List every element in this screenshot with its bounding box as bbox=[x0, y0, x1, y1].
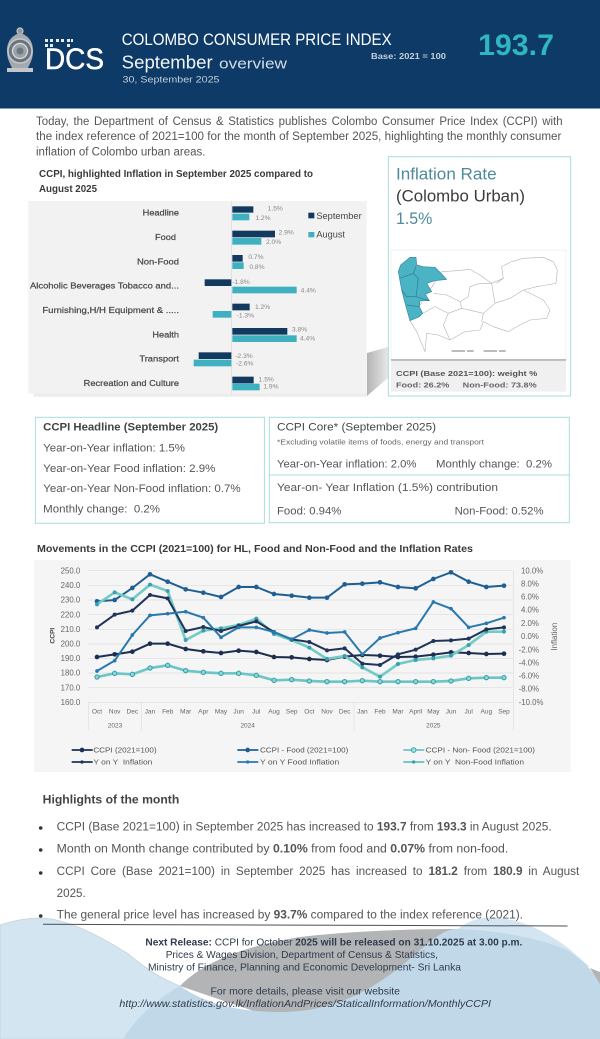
month labels: May bbox=[427, 708, 440, 715]
month labels: Oct bbox=[304, 708, 315, 715]
value labels: 4.4% bbox=[301, 287, 316, 294]
heading: CCPI Core* (September 2025) bbox=[277, 422, 436, 434]
month labels: Feb bbox=[162, 708, 174, 715]
weights footer: Non-Food: 73.8% bbox=[463, 382, 538, 389]
panel: CCPI headline bbox=[35, 417, 264, 523]
right axis labels: 0.0% bbox=[521, 632, 539, 641]
category labels: Non-Food bbox=[137, 256, 179, 266]
month labels: Aug bbox=[481, 708, 492, 715]
chart legend: CCPI - Food (2021=100) bbox=[260, 747, 348, 754]
month labels bbox=[92, 708, 510, 729]
header banner bbox=[0, 0, 600, 109]
right axis labels: -8.0% bbox=[519, 685, 539, 694]
month labels: Nov bbox=[321, 708, 334, 715]
bar chart: inflation by category bbox=[28, 201, 367, 397]
right axis labels bbox=[519, 566, 544, 707]
left axis labels: 170.0 bbox=[61, 683, 81, 692]
chart legend bbox=[72, 747, 535, 766]
line chart: CCPI and inflation movements bbox=[34, 560, 571, 772]
weights footer: CCPI (Base 2021=100): weight % bbox=[396, 371, 538, 378]
value labels: -2.3% bbox=[235, 353, 253, 360]
right axis labels: 6.0% bbox=[521, 593, 539, 602]
panel: CCPI core bbox=[269, 417, 569, 523]
month labels: Jun bbox=[446, 708, 457, 715]
series: Y on Y Food inflation bbox=[97, 602, 504, 671]
publisher: Ministry of Finance, Planning and Economic Development- Sri Lanka bbox=[148, 961, 461, 973]
legend bbox=[308, 211, 362, 240]
headline index value: 193.7 bbox=[478, 29, 554, 62]
month labels: Jan bbox=[357, 708, 368, 715]
series: CCPI Food bbox=[97, 572, 504, 601]
chart legend: Y on Y Non-Food Inflation bbox=[426, 759, 524, 766]
contribution: Year-on- Year Inflation (1.5%) contribution bbox=[277, 482, 498, 494]
website: http://www.statistics.gov.lk/InflationAndPrices/StaticalInformation/MonthlyCCPI bbox=[119, 998, 491, 1010]
category labels: Food bbox=[155, 232, 176, 242]
contribution bbox=[277, 482, 544, 518]
month labels: Jul bbox=[252, 708, 260, 715]
core figures bbox=[277, 458, 552, 470]
value labels bbox=[232, 205, 316, 391]
bar chart heading: CCPI, highlighted Inflation in September 2025 compared to bbox=[39, 169, 313, 180]
chart legend: Y on Y Inflation bbox=[93, 759, 152, 766]
series: Y on Y inflation bbox=[97, 595, 504, 665]
chart legend: CCPI (2021=100) bbox=[93, 747, 157, 754]
right axis labels: 8.0% bbox=[521, 579, 539, 588]
publisher: Prices & Wages Division, Department of Census & Statistics, bbox=[166, 949, 438, 961]
left axis labels bbox=[61, 566, 81, 707]
category labels: Recreation and Culture bbox=[84, 378, 179, 388]
highlights heading: Highlights of the month bbox=[43, 792, 179, 806]
month labels: 2023 bbox=[108, 722, 123, 729]
value labels: 1.9% bbox=[263, 384, 279, 391]
axis titles: CCPI bbox=[50, 628, 57, 644]
month labels: Mar bbox=[392, 708, 404, 715]
map of Sri Lanka districts bbox=[391, 250, 566, 361]
heading: Colombo Urban: (Colombo Urban) bbox=[396, 187, 525, 206]
core figures: Monthly change: 0.2% bbox=[436, 458, 552, 470]
month labels: Jan bbox=[145, 708, 156, 715]
website bbox=[119, 986, 491, 1010]
left axis labels: 160.0 bbox=[61, 698, 81, 707]
chart legend: Y on Y Food Inflation bbox=[260, 759, 339, 766]
rate value: 1.5% bbox=[396, 209, 433, 228]
chart legend: CCPI - Non- Food (2021=100) bbox=[426, 747, 535, 754]
bullet 3 bbox=[39, 866, 580, 900]
intro paragraph: the index reference of 2021=100 for the month of September 2025, highlighting the monthly consumer bbox=[36, 131, 562, 143]
month labels: 2024 bbox=[240, 722, 255, 729]
logo: DCS: DCS bbox=[45, 43, 104, 76]
subtitle: overview bbox=[219, 55, 287, 72]
weights footer bbox=[391, 361, 566, 392]
right axis labels: -4.0% bbox=[519, 658, 539, 667]
line chart heading: Movements in the CCPI (2021=100) for HL, Food and Non-Food and the Inflation Rates bbox=[37, 543, 473, 555]
value labels: 1.5% bbox=[268, 205, 283, 212]
subtitle bbox=[122, 51, 287, 72]
intro paragraph bbox=[36, 116, 563, 159]
intro paragraph: inflation of Colombo urban areas. bbox=[36, 147, 206, 159]
legend: September bbox=[316, 211, 362, 221]
value labels: 3.8% bbox=[292, 326, 307, 333]
value labels: 0.8% bbox=[249, 264, 265, 271]
month labels: Jul bbox=[465, 708, 473, 715]
headline figures bbox=[43, 442, 241, 515]
August bars bbox=[194, 214, 297, 390]
heading: CCPI Headline (September 2025) bbox=[43, 422, 219, 434]
right axis labels: 10.0% bbox=[521, 566, 543, 575]
series: CCPI Non-Food bbox=[97, 665, 504, 682]
value labels: 0.7% bbox=[248, 254, 264, 261]
core figures: Year-on-Year inflation: 2.0% bbox=[277, 458, 417, 470]
value labels: -1.3% bbox=[237, 313, 254, 320]
footer background waves bbox=[0, 918, 600, 1039]
headline figures: Monthly change: 0.2% bbox=[43, 503, 160, 515]
next release: Next Release: CCPI for October 2025 will be released on 31.10.2025 at 3.00 p.m. bbox=[145, 937, 522, 949]
left axis labels: 190.0 bbox=[61, 654, 81, 663]
axis titles: Inflation bbox=[550, 623, 559, 651]
footnote: *Excluding volatile items of foods, energy and transport bbox=[277, 439, 484, 446]
category labels: Headline bbox=[143, 207, 179, 217]
bar chart heading: August 2025 bbox=[39, 184, 97, 195]
value labels: -2.6% bbox=[236, 361, 253, 368]
category labels: Health bbox=[152, 329, 179, 339]
bullet 3: 2025. bbox=[57, 888, 86, 900]
value labels: 2.0% bbox=[266, 239, 281, 246]
right axis labels: -10.0% bbox=[519, 698, 544, 707]
bullet 4: The general price level has increased by 93.7% compared to the index reference (2021). bbox=[57, 910, 523, 922]
month labels: April bbox=[409, 708, 422, 715]
month labels: Apr bbox=[198, 708, 209, 715]
left axis labels: 230.0 bbox=[61, 596, 81, 605]
month labels: Feb bbox=[374, 708, 386, 715]
heading: inflation rate: Inflation Rate bbox=[396, 164, 497, 183]
left axis labels: 250.0 bbox=[61, 566, 81, 575]
value labels: 4.4% bbox=[300, 336, 315, 343]
series: CCPI headline bbox=[97, 644, 504, 660]
series: Y on Y Non-Food inflation bbox=[97, 585, 504, 677]
category labels bbox=[30, 207, 180, 388]
value labels: 1.2% bbox=[255, 215, 271, 222]
publisher bbox=[148, 949, 461, 973]
month labels: Mar bbox=[180, 708, 192, 715]
left axis labels: 220.0 bbox=[61, 610, 81, 619]
category labels: Alcoholic Beverages Tobacco and... bbox=[30, 281, 179, 291]
category labels: Transport bbox=[139, 354, 180, 364]
value labels: 2.9% bbox=[279, 229, 294, 236]
month labels: May bbox=[215, 708, 228, 715]
right axis labels: -2.0% bbox=[519, 645, 539, 654]
headline figures: Year-on-Year inflation: 1.5% bbox=[43, 442, 185, 454]
footer text bbox=[119, 937, 522, 1010]
axis titles bbox=[50, 623, 559, 651]
month labels: Aug bbox=[268, 708, 280, 715]
month labels: Sep bbox=[286, 708, 298, 715]
contribution: Non-Food: 0.52% bbox=[455, 506, 544, 518]
right axis labels: 2.0% bbox=[521, 619, 539, 628]
month labels: Sep bbox=[498, 708, 510, 715]
icon: national emblem bbox=[7, 28, 33, 72]
month labels: Dec bbox=[127, 708, 139, 715]
right axis labels: -6.0% bbox=[519, 672, 539, 681]
panel: inflation rate map bbox=[388, 157, 571, 396]
month labels: 2025 bbox=[426, 722, 441, 729]
left axis labels: 180.0 bbox=[61, 669, 81, 678]
contribution: Food: 0.94% bbox=[277, 506, 342, 518]
category labels: Furnishing,H/H Equipment & ..... bbox=[42, 305, 179, 315]
bullet 2: Month on Month change contributed by 0.10% from food and 0.07% from non-food. bbox=[57, 844, 508, 856]
September bars bbox=[199, 206, 287, 383]
date: 30, September 2025 bbox=[122, 75, 220, 86]
website: For more details, please visit our website bbox=[210, 986, 400, 998]
chart shadow wedge bbox=[367, 347, 388, 396]
right axis labels: 4.0% bbox=[521, 606, 539, 615]
bullet 3: CCPI Core (Base 2021=100) in September 2025 has increased to 181.2 from 180.9 in August bbox=[57, 866, 580, 878]
value labels: 1.5% bbox=[259, 377, 274, 384]
value labels: 1.2% bbox=[255, 304, 270, 311]
value labels: -1.8% bbox=[232, 279, 250, 286]
title: COLOMBO CONSUMER PRICE INDEX bbox=[122, 31, 392, 49]
subtitle: September bbox=[122, 51, 213, 72]
left axis labels: 200.0 bbox=[61, 640, 81, 649]
intro paragraph: Today, the Department of Census & Statistics publishes Colombo Consumer Price Index (CCPI) with bbox=[36, 116, 563, 128]
highlights section bbox=[39, 792, 580, 922]
base note: Base: 2021 = 100 bbox=[371, 51, 446, 61]
headline figures: Year-on-Year Food inflation: 2.9% bbox=[43, 463, 216, 475]
bullet 1: CCPI (Base 2021=100) in September 2025 has increased to 193.7 from 193.3 in August 2025. bbox=[57, 822, 552, 834]
left axis labels: 240.0 bbox=[61, 581, 81, 590]
legend: August bbox=[316, 230, 345, 240]
left axis labels: 210.0 bbox=[61, 625, 81, 634]
month labels: Jun bbox=[233, 708, 244, 715]
month labels: Oct bbox=[92, 708, 102, 715]
weights footer: Food: 26.2% bbox=[396, 382, 450, 389]
headline figures: Year-on-Year Non-Food inflation: 0.7% bbox=[43, 483, 241, 495]
month labels: Dec bbox=[339, 708, 351, 715]
bar chart heading bbox=[39, 169, 313, 195]
month labels: Nov bbox=[109, 708, 121, 715]
